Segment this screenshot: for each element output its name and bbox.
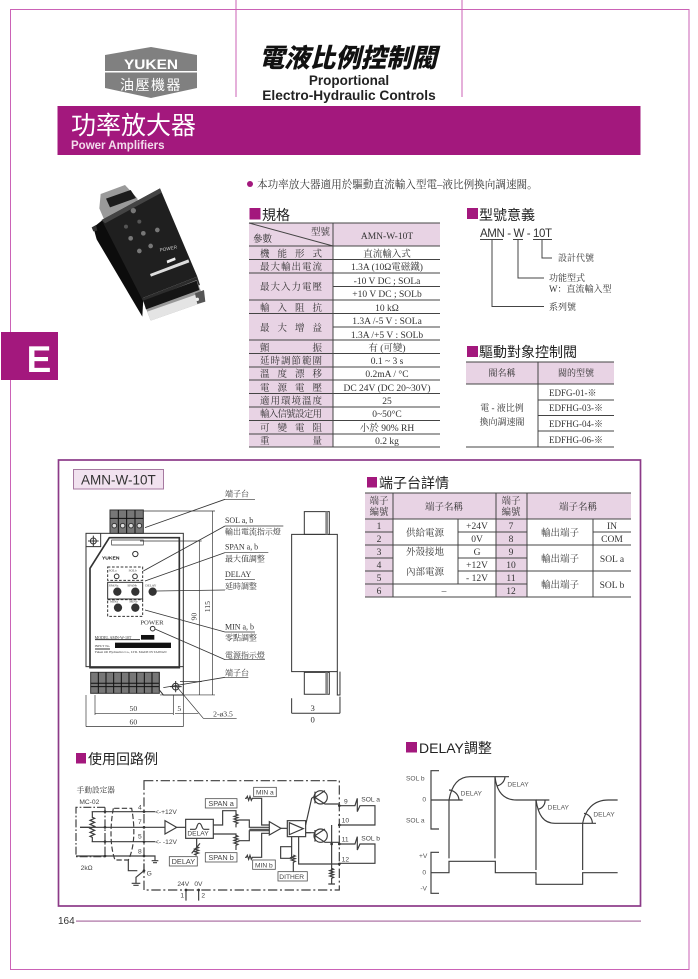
circuit labels: <- -12V — [155, 839, 178, 846]
terminal table text: 端子名稱 — [559, 501, 597, 513]
table right column: values: 直流輸入式 — [363, 248, 411, 260]
panel labels on device: INPUT No. — [95, 644, 110, 648]
terminal table text: 11 — [506, 574, 516, 584]
panel labels on device: YUKEN — [102, 555, 120, 561]
terminal table text: 1 — [377, 522, 382, 532]
panel: AMN-W-10T details — [58, 460, 640, 906]
banner: power amplifiers: 功率放大器 — [71, 112, 196, 140]
heading: driven valves: 驅動對象控制閥 — [479, 344, 577, 360]
dimension values: 50 — [129, 704, 137, 713]
callout: leaders and labels: 端子台 — [225, 489, 249, 499]
terminal table text: 5 — [377, 574, 382, 584]
callout: leaders and labels: 電源指示燈 — [225, 650, 265, 660]
dimension values: 3 — [310, 703, 315, 713]
circuit labels: 1 — [180, 892, 184, 899]
logo: Yuken: YUKEN — [124, 56, 178, 72]
circuit label boxes: DELAY — [172, 857, 195, 866]
terminal table text: 端子名稱 — [425, 501, 463, 513]
panel labels on device: SOLa — [109, 569, 117, 573]
heading: terminal details: 端子台詳情 — [379, 475, 449, 491]
product photo — [92, 185, 205, 321]
panel labels on device: SOLb — [129, 569, 137, 573]
diagram: model code: 功能型式 — [549, 272, 585, 283]
table left column: parameter names: 延時調節範圍 — [260, 355, 322, 367]
circuit label boxes: SPAN b — [208, 853, 234, 862]
title: 電液比例控制閥 — [259, 38, 441, 75]
terminal table text: 2 — [377, 535, 382, 545]
circuit labels: SOL a — [361, 796, 380, 803]
terminal table text: 外殼接地 — [406, 546, 444, 558]
dimension values: 90 — [190, 613, 199, 620]
terminal table text: 6 — [377, 587, 382, 597]
terminal table text: G — [474, 548, 481, 558]
banner: power amplifiers — [58, 106, 640, 155]
circuit labels: 手動設定器 — [77, 785, 115, 795]
terminal table text: 編號 — [369, 506, 389, 518]
table right column: values: 1.3A /-5 V : SOLa — [352, 317, 423, 327]
terminal table text: 內部電源 — [406, 566, 444, 578]
table left column: parameter names — [253, 226, 331, 447]
circuit labels: 10 — [342, 818, 349, 825]
circuit label boxes: MIN a — [256, 790, 274, 797]
circuit diagram — [76, 781, 380, 901]
table right column: values: AMN-W-10T — [361, 232, 413, 242]
terminal table text — [369, 495, 625, 597]
table: target valves: 閥的型號 — [558, 367, 594, 378]
diagram: model code: AMN - W - 10T — [480, 228, 552, 240]
table: terminal block — [365, 493, 631, 597]
table left column: parameter names: 機能形式 — [260, 248, 322, 260]
terminal table text: 端子 — [369, 495, 389, 507]
heading: delay adjustment: DELAY調整 — [419, 740, 492, 756]
diagram: model code — [480, 228, 612, 312]
top terminal block — [110, 510, 143, 533]
heading: specs: 規格 — [262, 207, 290, 223]
callout: leaders and labels: 零點調整 — [225, 633, 257, 643]
model tag: AMN-W-10T — [81, 472, 156, 488]
waveform labels: SOL b — [406, 775, 425, 782]
table: target valves: 閥名稱 — [488, 367, 516, 378]
circuit label boxes: DITHER — [279, 874, 304, 881]
terminal table text: 輸出端子 — [541, 527, 579, 539]
table left column: parameter names: 最大增益 — [260, 322, 322, 334]
circuit labels: SOL b — [361, 835, 380, 842]
table: target valves: EDFHG-03-※ — [549, 403, 603, 413]
diagram: model code: 設計代號 — [558, 252, 594, 263]
table right column: values: 小於 90% RH — [360, 422, 414, 434]
terminal table text: IN — [607, 522, 617, 532]
side view — [292, 512, 340, 713]
waveform labels: 0 — [422, 870, 426, 877]
circuit labels: 11 — [342, 837, 349, 844]
dimension values: 2-ø3.5 — [213, 710, 233, 719]
table: target valves: EDFHG-04-※ — [549, 419, 603, 429]
circuit labels: 5 — [138, 833, 142, 840]
panel labels on device: DELAY — [145, 583, 157, 587]
logo: Yuken — [105, 47, 197, 98]
terminal table text: SOL b — [600, 581, 625, 591]
callout: leaders and labels: DELAY — [225, 570, 252, 579]
circuit labels: G — [147, 870, 152, 877]
table left column: parameter names: 重量 — [260, 435, 322, 447]
table right column: values: 25 — [382, 397, 392, 407]
table left column: parameter names: 最大輸出電流 — [260, 261, 322, 273]
circuit labels: 0V — [194, 881, 203, 888]
terminal table text: 4 — [377, 561, 382, 571]
circuit labels: <-+12V — [155, 809, 177, 816]
table left column: parameter names: 參數 — [253, 233, 273, 245]
waveform labels: 0 — [422, 797, 426, 804]
circuit labels: DELAY — [187, 830, 209, 837]
waveform labels: DELAY — [548, 804, 570, 811]
circuit label boxes — [169, 787, 307, 881]
terminal table text: 12 — [506, 587, 516, 597]
model tag — [74, 470, 164, 489]
dimension values: 115 — [203, 601, 212, 612]
table right column: values: 0.2 kg — [375, 437, 399, 447]
waveform labels: DELAY — [593, 812, 615, 819]
waveform labels: +V — [419, 853, 428, 860]
table left column: parameter names: 電源電壓 — [260, 382, 322, 394]
terminal table text: 10 — [506, 561, 516, 571]
circuit labels: 8 — [138, 848, 142, 855]
panel labels on device: MODEL AMN-W-10T — [95, 635, 132, 640]
table left column: parameter names: 適用環境溫度 — [260, 395, 322, 407]
terminal table text: 供給電源 — [406, 527, 444, 539]
circuit label boxes: SPAN a — [208, 799, 235, 808]
table: target valves: EDFHG-06-※ — [549, 435, 603, 445]
circuit labels: 4 — [138, 804, 142, 811]
circuit labels: 24V — [177, 881, 190, 888]
table right column: values: DC 24V (DC 20~30V) — [343, 383, 431, 394]
tab: section E: E — [27, 339, 51, 380]
front view outline — [86, 533, 183, 668]
footer: page number: 164 — [58, 916, 75, 927]
terminal table text: SOL a — [600, 555, 625, 565]
table right column: values: -10 V DC ; SOLa — [354, 277, 421, 287]
tab: section E — [1, 332, 58, 380]
logo: Yuken: 油壓機器 — [120, 77, 182, 93]
callout: leaders and labels — [143, 489, 283, 688]
dimension values: 60 — [129, 717, 137, 726]
table left column: parameter names: 顫振 — [260, 342, 322, 354]
callout: leaders and labels: SOL a, b — [225, 516, 253, 525]
product photo: POWER — [159, 245, 178, 253]
title: Electro-Hydraulic Controls — [262, 88, 436, 103]
waveform labels: DELAY — [507, 781, 529, 788]
table: target valves: EDFG-01-※ — [549, 388, 596, 398]
dimension lines — [86, 511, 237, 727]
table left column: parameter names: 最大入力電壓 — [260, 281, 322, 293]
callout: leaders and labels: 延時調整 — [225, 581, 257, 591]
terminal table text: – — [441, 587, 447, 597]
table right column: values — [343, 232, 431, 447]
title — [259, 38, 441, 103]
callout: leaders and labels: MIN a, b — [225, 622, 254, 631]
terminal table text: 輸出端子 — [541, 553, 579, 565]
table left column: parameter names: 型號 — [311, 226, 331, 238]
banner: power amplifiers: Power Amplifiers — [71, 140, 165, 152]
panel labels on device: SPANb — [127, 583, 138, 587]
table: target valves — [466, 362, 614, 447]
terminal table text: 3 — [377, 548, 382, 558]
terminal table text: 輸出端子 — [541, 579, 579, 591]
waveform labels — [406, 775, 615, 892]
panel labels on device: Yuken Oil Hydraulics Co., LTD. MADE IN TAIWAN — [95, 650, 167, 655]
terminal table text: COM — [601, 535, 623, 545]
circuit labels: 9 — [344, 798, 348, 805]
panel labels on device: SPANa — [109, 583, 119, 587]
waveform labels: -V — [420, 885, 428, 892]
table right column: values: +10 V DC ; SOLb — [352, 290, 422, 300]
callout: leaders and labels: 最大值調整 — [225, 554, 265, 564]
heading: specs — [250, 207, 290, 223]
dimension drawing — [86, 489, 340, 727]
table right column: values: 0.1 ~ 3 s — [371, 357, 404, 367]
table: target valves: 電 - 液比例 — [480, 402, 524, 413]
waveform labels: SOL a — [406, 818, 425, 825]
dimension values — [129, 601, 315, 726]
terminal table text: 端子 — [501, 495, 521, 507]
waveform labels: DELAY — [461, 791, 483, 798]
table left column: parameter names: 輸入信號設定用 — [260, 408, 322, 420]
panel labels on device: MINa — [110, 599, 118, 603]
callout: leaders and labels: 端子台 — [225, 667, 249, 677]
circuit labels: 7 — [138, 819, 142, 826]
circuit labels: 12 — [342, 857, 349, 864]
dimension values: 5 — [177, 704, 181, 713]
terminal table text: - 12V — [466, 574, 488, 584]
circuit labels — [77, 785, 380, 899]
diagram: model code: W：直流輸入型 — [549, 283, 612, 294]
table right column: values: 1.3A /+5 V : SOLb — [351, 331, 423, 341]
panel labels on device: MINb — [129, 599, 138, 603]
circuit label boxes: MIN b — [255, 862, 273, 869]
panel labels on device: POWER — [140, 619, 164, 626]
table right column: values: 0.2mA / °C — [365, 369, 409, 380]
callout: leaders and labels: 輸出電流指示燈 — [225, 526, 281, 536]
heading: circuit example: 使用回路例 — [88, 751, 158, 767]
table right column: values: 10 kΩ — [375, 304, 399, 314]
diagram: model code: 系列號 — [549, 301, 576, 312]
table right column: values: 有 (可變) — [368, 342, 406, 354]
circuit labels: 2 — [201, 892, 205, 899]
table: target valves: 換向調速閥 — [479, 416, 525, 427]
terminal table text: 7 — [509, 522, 514, 532]
title: Proportional — [309, 73, 389, 88]
panel labels on device — [95, 555, 171, 655]
terminal table text: +24V — [466, 522, 488, 532]
bullet: intro sentence: 本功率放大器適用於驅動直流輸入型電–液比例換向調速閥。 — [257, 178, 538, 191]
dimension values: 0 — [310, 714, 315, 724]
terminal table text: 8 — [509, 535, 514, 545]
table right column: values: 1.3A (10Ω電磁鐵) — [351, 261, 423, 273]
bottom terminal block — [91, 667, 183, 695]
table left column: parameter names: 輸入阻抗 — [260, 302, 322, 314]
table right column: values: 0~50°C — [372, 409, 402, 420]
table: specifications — [249, 223, 440, 447]
table left column: parameter names: 溫度漂移 — [260, 368, 322, 380]
heading: model code meaning: 型號意義 — [479, 207, 535, 223]
terminal table text: 0V — [471, 535, 483, 545]
terminal table text: 編號 — [501, 506, 521, 518]
terminal table text: +12V — [466, 561, 488, 571]
chart: delay waveforms — [406, 771, 618, 893]
circuit labels: 2kΩ — [81, 865, 93, 872]
callout: leaders and labels: SPAN a, b — [225, 543, 258, 552]
terminal table text: 9 — [509, 548, 514, 558]
table left column: parameter names: 可變電阻 — [260, 422, 322, 434]
circuit labels: MC-02 — [79, 799, 100, 806]
